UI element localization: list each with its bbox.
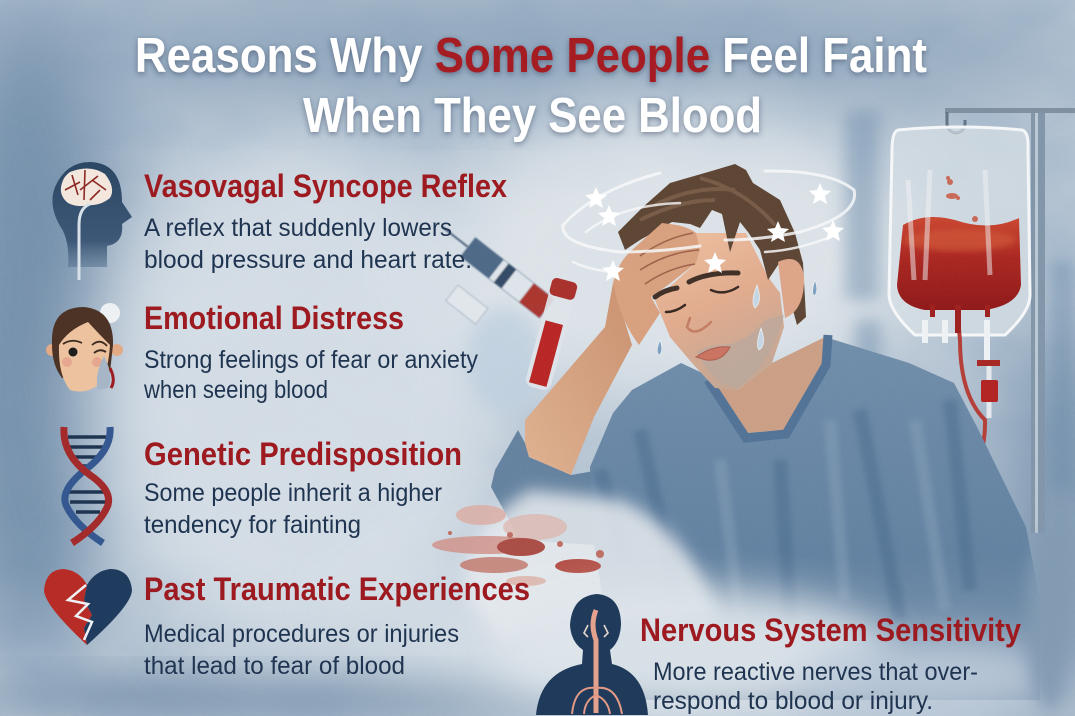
closed eyes, nose and mouth	[655, 273, 738, 360]
description: blood pressure and heart rate.	[144, 246, 472, 274]
face	[655, 233, 784, 390]
icon: head with brain	[52, 162, 132, 280]
icon: tearful face	[46, 303, 123, 392]
description: that lead to fear of blood	[144, 652, 405, 680]
sweat drops	[657, 280, 817, 355]
bag ports and tube	[925, 320, 987, 360]
heading: Past Traumatic Experiences	[144, 571, 530, 607]
reason 5: nervous system sensitivity	[536, 594, 1021, 715]
illustration: syringe and blood vial	[435, 218, 578, 412]
icon: body silhouette with nerves	[536, 594, 648, 715]
neck	[711, 337, 825, 433]
reason 3: genetic predisposition	[64, 427, 462, 543]
description	[143, 346, 478, 404]
icon: dizzy halo with stars	[563, 171, 855, 281]
iv pole	[945, 108, 1075, 533]
description: Some people inherit a higher	[144, 479, 442, 507]
description: respond to blood or injury.	[653, 687, 933, 715]
illustration: IV blood bag on a stand	[889, 108, 1075, 533]
heading: Emotional Distress	[144, 300, 404, 336]
description	[144, 620, 459, 680]
vial	[446, 285, 488, 324]
heading: Nervous System Sensitivity	[640, 612, 1021, 648]
bag body	[889, 127, 1030, 335]
syringe	[435, 218, 554, 318]
description: when seeing blood	[143, 376, 328, 404]
blood in bag	[897, 217, 1021, 310]
illustration: faint man holding his head	[491, 164, 1040, 700]
description	[653, 658, 978, 715]
description: More reactive nerves that over-	[653, 658, 978, 686]
reason 1: vasovagal syncope reflex	[52, 162, 507, 280]
description	[144, 214, 472, 274]
ear	[778, 259, 804, 318]
hair	[618, 164, 806, 325]
title: Reasons Why Some People Feel Faint	[135, 29, 927, 83]
blood tube	[524, 277, 578, 392]
reason 4: past traumatic experiences	[44, 569, 530, 680]
icon: dna helix	[64, 427, 110, 543]
gloved hand mist	[467, 308, 543, 412]
illustration: blood stain on the table	[432, 490, 720, 640]
reason 2: emotional distress	[46, 300, 478, 404]
foreground mist over lower shirt	[490, 530, 1074, 715]
shirt body	[590, 337, 1040, 700]
hand on forehead	[613, 223, 700, 345]
collar	[708, 335, 828, 438]
title: When They See Blood	[303, 89, 762, 143]
heading: Vasovagal Syncope Reflex	[144, 168, 507, 204]
shirt sleeve	[491, 430, 600, 545]
description	[144, 479, 442, 539]
description: tendency for fainting	[144, 511, 361, 539]
forearm	[525, 283, 632, 475]
description: A reflex that suddenly lowers	[144, 214, 452, 242]
description: Medical procedures or injuries	[144, 620, 459, 648]
title	[135, 29, 927, 143]
icon: broken heart	[44, 569, 132, 645]
heading: Genetic Predisposition	[144, 436, 462, 472]
description: Strong feelings of fear or anxiety	[144, 346, 478, 374]
